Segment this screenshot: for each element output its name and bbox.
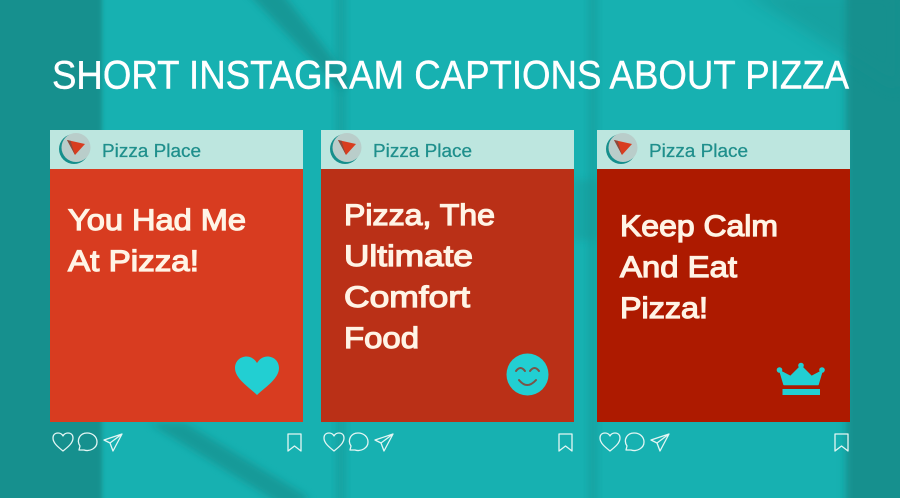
panel: post 3 [597,130,850,422]
panel: post 1 [50,130,303,422]
post 1 action icons [53,433,301,451]
icon: crown [777,363,825,395]
post 3 caption: And Eat [620,251,738,284]
post 2 image background [321,169,574,422]
icon: heart [235,356,279,395]
post 2 logo [330,133,362,164]
title: SHORT INSTAGRAM CAPTIONS ABOUT PIZZA [52,54,849,98]
post 2 action icons [324,433,572,451]
post 2 caption [344,199,495,355]
post 1 caption: You Had Me [68,204,246,237]
panel: post 2 [321,130,574,422]
post 2 account name: Pizza Place [373,141,472,161]
post 2 header bar [321,130,574,169]
post 2 caption: Food [344,322,419,355]
post 1 caption: At Pizza! [68,245,199,278]
post 1 caption [68,204,246,278]
post 1 logo [59,133,90,164]
post 2 caption: Pizza, The [344,199,495,232]
post 3 action icons [600,433,848,451]
post 3 header bar [597,130,850,169]
post 2 caption: Comfort [344,281,471,314]
post 3 image background [597,169,850,422]
post 3 caption: Pizza! [620,292,708,325]
post 2 caption: Ultimate [344,240,473,273]
post 3 logo [606,133,638,164]
post 1 account name: Pizza Place [102,141,201,161]
post 3 caption: Keep Calm [620,210,778,243]
post 1 image background [50,169,303,422]
post 1 header bar [50,130,303,169]
icon: smiley [506,354,548,396]
post 3 caption [620,210,778,325]
post 3 account name: Pizza Place [649,141,748,161]
